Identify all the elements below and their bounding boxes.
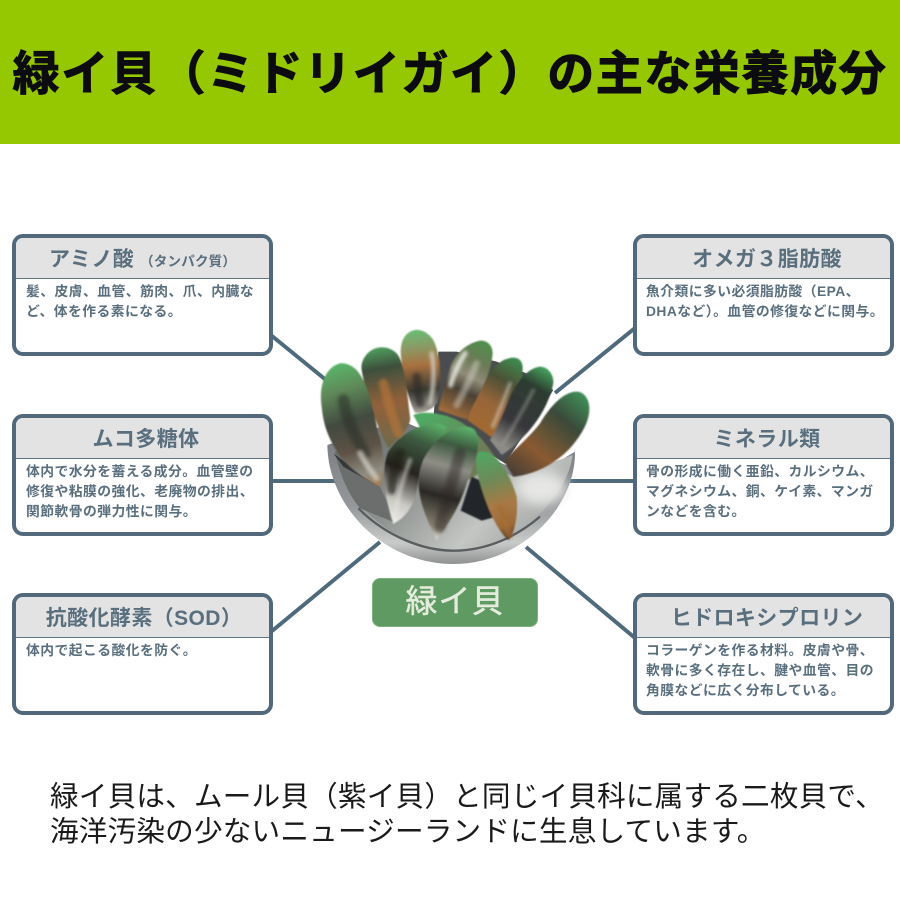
note text: 緑イ貝は、ムール貝（紫イ貝）と同じイ貝科に属する二枚貝で、: [50, 781, 884, 813]
panel: minerals: [633, 414, 894, 536]
note text: [50, 781, 884, 848]
text: amino acids: 髪、皮膚、血管、筋肉、爪、内臓な: [26, 284, 254, 299]
heading: amino acids: アミノ酸 （タンパク質）: [49, 248, 236, 271]
text: minerals: ンなどを含む。: [646, 504, 746, 519]
panel: SOD: [12, 593, 273, 715]
title banner: [0, 0, 900, 144]
title: 緑イ貝（ミドリイガイ）の主な栄養成分: [13, 47, 887, 100]
note text: 海洋汚染の少ないニュージーランドに生息しています。: [50, 816, 766, 848]
center label: [372, 578, 538, 627]
mussel shells: [321, 330, 589, 540]
heading: minerals: [637, 418, 890, 459]
text: hydroxyproline: [646, 643, 874, 698]
shell highlights: [343, 353, 533, 535]
connector: middle left: [272, 479, 335, 483]
text: minerals: 骨の形成に働く亜鉛、カルシウム、: [646, 464, 874, 479]
heading: hydroxyproline: [637, 597, 890, 638]
panel: mucopolysaccharide: [12, 414, 273, 536]
text: amino acids: [26, 284, 254, 319]
heading: amino acids: [16, 238, 269, 279]
heading: SOD: 抗酸化酵素（SOD）: [46, 607, 242, 630]
text: mucopolysaccharide: 関節軟骨の弾力性に関与。: [26, 504, 197, 519]
text: hydroxyproline: コラーゲンを作る材料。皮膚や骨、: [646, 643, 874, 658]
connector: middle right: [570, 479, 635, 483]
panel: hydroxyproline: [633, 593, 894, 715]
connector: top left: [272, 336, 326, 380]
text: minerals: マグネシウム、銅、ケイ素、マンガ: [646, 484, 874, 499]
text: omega 3: DHAなど）。血管の修復などに関与。: [646, 304, 884, 319]
heading: mucopolysaccharide: [16, 418, 269, 459]
text: amino acids: ど、体を作る素になる。: [26, 304, 182, 319]
heading: SOD: [16, 597, 269, 638]
icon: plate of green mussels: [321, 330, 589, 564]
connector: bottom left: [272, 542, 380, 631]
connector: top right: [555, 328, 635, 393]
text: SOD: 体内で起こる酸化を防ぐ。: [26, 643, 197, 658]
heading: minerals: ミネラル類: [714, 428, 820, 451]
heading: hydroxyproline: ヒドロキシプロリン: [671, 607, 863, 630]
text: minerals: [646, 464, 874, 519]
text: mucopolysaccharide: [26, 464, 254, 519]
panel: amino acids: [12, 234, 273, 356]
center label: 緑イ貝: [405, 583, 504, 619]
text: hydroxyproline: 角膜などに広く分布している。: [646, 683, 845, 698]
panel: omega 3: [633, 234, 894, 356]
plate: [327, 352, 575, 564]
text: mucopolysaccharide: 修復や粘膜の強化、老廃物の排出、: [26, 484, 254, 499]
text: omega 3: 魚介類に多い必須脂肪酸（EPA、: [646, 284, 860, 299]
heading: mucopolysaccharide: ムコ多糖体: [92, 428, 200, 451]
connector: bottom right: [526, 547, 635, 638]
text: omega 3: [646, 284, 884, 319]
text: mucopolysaccharide: 体内で水分を蓄える成分。血管壁の: [26, 464, 254, 479]
heading: omega 3: [637, 238, 890, 279]
heading: omega 3: オメガ３脂肪酸: [692, 248, 842, 271]
text: hydroxyproline: 軟骨に多く存在し、腱や血管、目の: [646, 663, 874, 678]
